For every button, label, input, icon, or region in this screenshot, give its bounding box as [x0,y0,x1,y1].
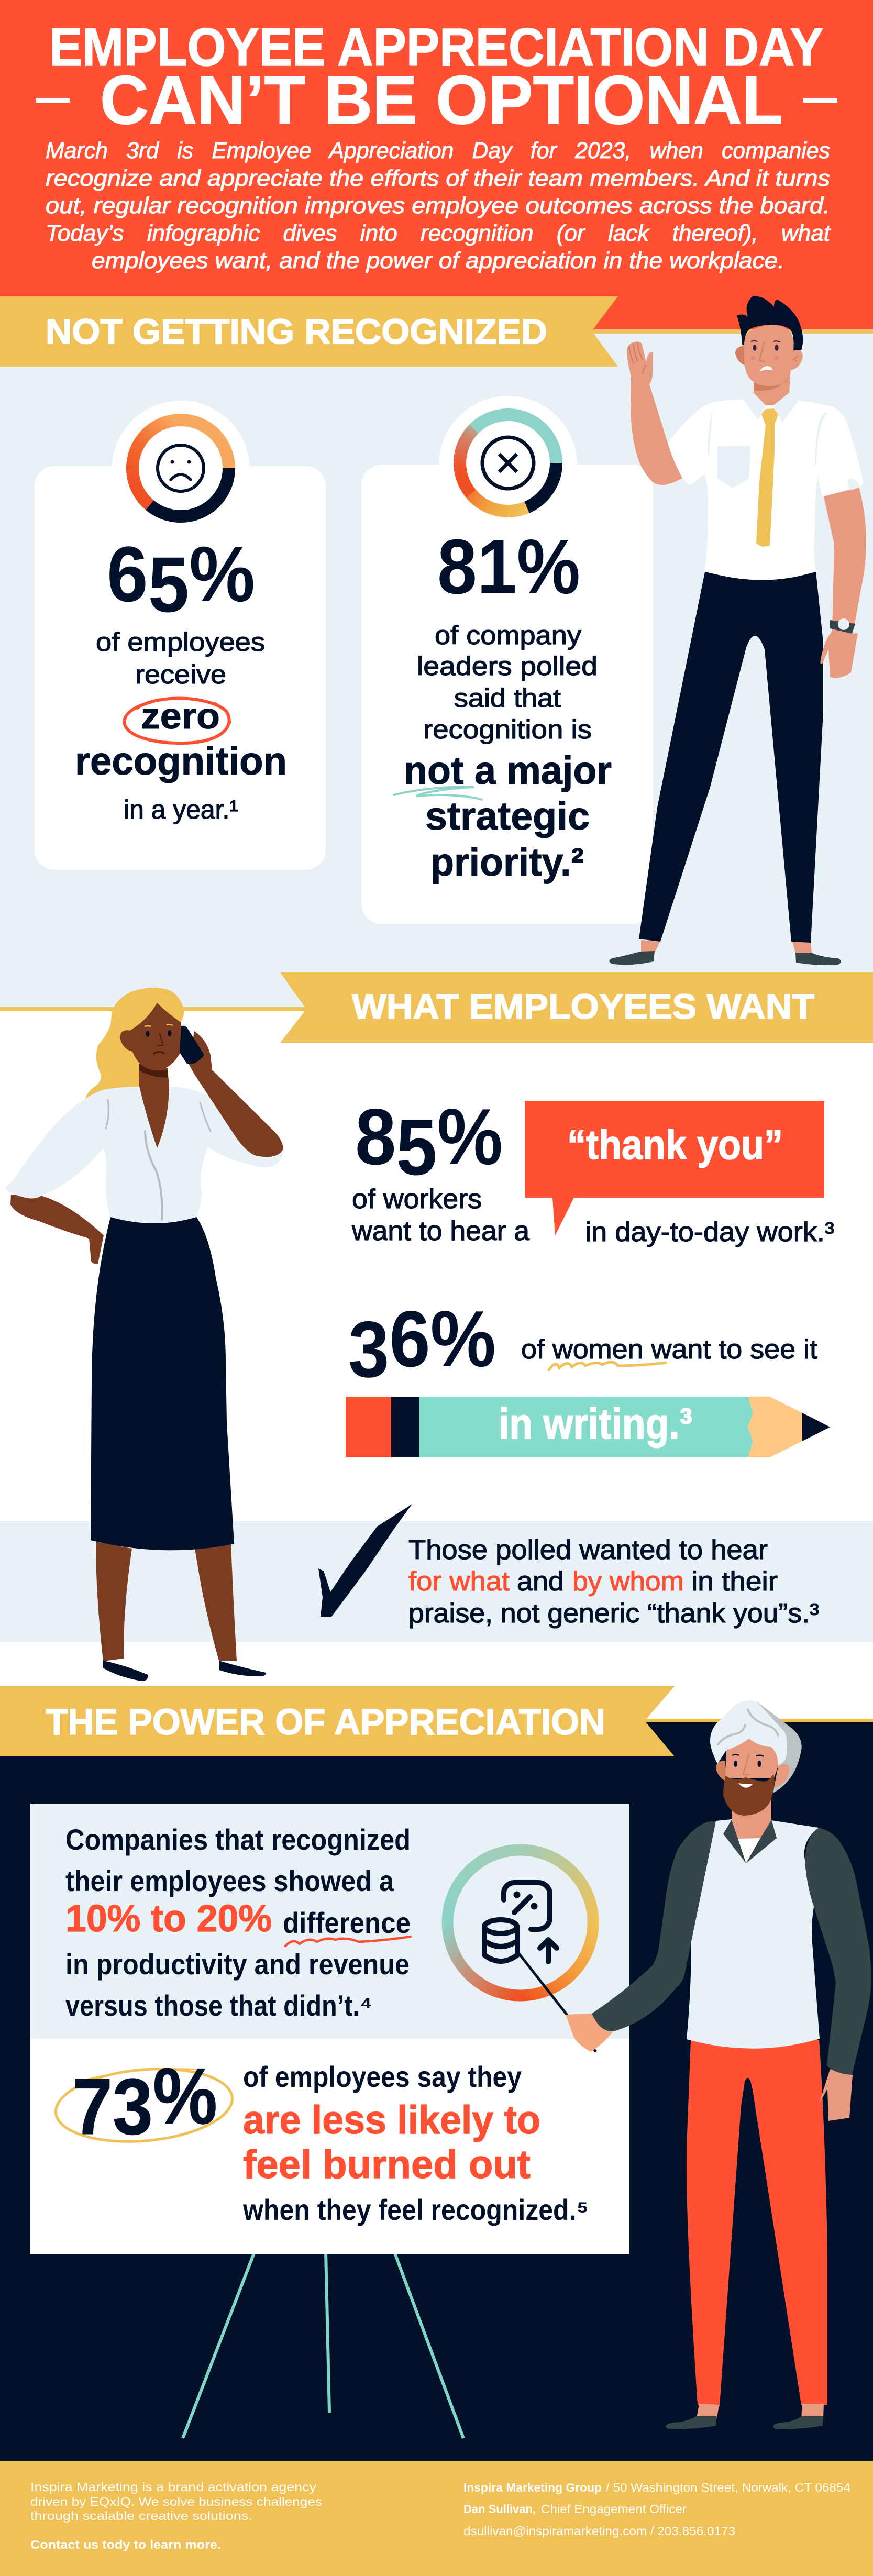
neck [732,1796,771,1863]
speech bubble [525,1101,824,1235]
intro paragraph: recognize and appreciate the efforts of their team members. And it turns [46,165,830,191]
head [744,325,793,385]
text: for what [408,1566,510,1597]
stat: 73%: 73 [72,2062,153,2151]
text [408,1535,819,1629]
text: of employees receive zero recognition in a year: in a year.¹ [124,795,238,824]
text: want to hear a [351,1216,529,1246]
text: 10% to 20% difference: their employees showed a [65,1864,394,1897]
text: less likely to feel burned out: are less likely to [243,2098,540,2142]
footer text: contact: Chief Engagement Officer [541,2502,687,2516]
text: of employees receive zero recognition in a year: recognition [75,739,287,783]
gold oval [53,2062,235,2148]
pointer stick [518,1952,596,2052]
text: 10% to 20% difference: Companies that recognized [65,1823,411,1856]
stat: 73%: % [153,2052,217,2141]
stat: 36% in writing [346,1295,830,1457]
footer text: about [30,2480,322,2551]
footer text: about: Contact us tody to learn more. [30,2538,221,2551]
text: of company leaders polled said recognition is not a major strategic priority: not a major [404,748,612,792]
text: less likely to feel burned out: when they feel recognized.⁵ [242,2193,589,2226]
text: in day-to-day work.³ [585,1217,834,1247]
text: of employees receive zero recognition in a year: zero [141,695,220,736]
footer text: contact: / 50 Washington Street, Norwalk, CT 06854 [606,2481,850,2494]
number: 6% [389,1295,496,1384]
footer text: about: Inspira Marketing is a brand activation agency [30,2480,317,2494]
blouse [6,1087,284,1223]
beard [723,1774,775,1816]
text [351,1184,529,1246]
hair [737,296,803,350]
icon: ring with database and percent [448,1850,593,1995]
text: of company leaders polled said recognition is not a major strategic priority: leaders polled [417,651,598,681]
face [129,1003,182,1070]
phone arm [189,1031,283,1157]
ears [716,1761,726,1782]
title line 1: EMPLOYEE APPRECIATION DAY [49,17,823,77]
icon: check mark [318,1504,412,1617]
face details [732,1754,764,1788]
ankles and shoes [666,2404,824,2429]
text: of company leaders polled said recognition is not a major strategic priority: priority.² [430,840,584,884]
icon: sad face ring [132,420,229,516]
hand holding pointer [566,2014,613,2052]
footer text: contact: Dan Sullivan, [463,2502,536,2516]
text: in their [691,1566,778,1597]
gold scribble [549,1362,666,1370]
shoes [103,1661,266,1681]
text: praise, not generic “thank you”s.³ [408,1598,819,1629]
text: of company leaders polled said recognition is not a major strategic priority: of company [435,621,581,650]
stat: 65%: 5 [148,540,189,628]
right sleeve [804,1828,871,2075]
footer text: about: driven by EQxIQ. We solve business challenges [30,2495,322,2508]
red scribble [285,1937,411,1946]
ankles and shoes [609,940,841,965]
face details [145,1024,173,1054]
footer text: contact: Inspira Marketing Group [463,2481,602,2494]
number: 8 [355,1092,400,1181]
teal scribble [394,787,482,800]
face [725,1739,778,1778]
red circle scribble [124,698,230,743]
speech bubble: “thank you” [567,1121,783,1168]
text: of employees receive zero recognition in a year: receive [135,660,226,689]
text: of workers [352,1184,482,1214]
text: of company leaders polled said recognition is not a major strategic priority: strategic [425,794,590,838]
illustration: presenter man [566,1700,871,2429]
text: of company leaders polled said recognition is not a major strategic priority [404,621,612,884]
text: 10% to 20% difference [65,1823,411,2022]
banner: what employees want: WHAT EMPLOYEES WANT [352,987,814,1026]
text: and [517,1566,564,1597]
text: of employees receive zero recognition in a year: of employees [96,627,265,657]
text: less likely to feel burned out: feel burned out [243,2142,531,2187]
footer [0,2461,873,2576]
banner: not getting recognized [0,296,618,367]
panel: 81% card [361,396,653,924]
panel: presentation board [30,1804,629,2254]
watch [830,618,855,634]
icon: x ring [460,415,556,511]
shirt [668,400,864,580]
trousers [639,572,823,944]
banner: what employees want [280,972,873,1043]
right hand [819,2069,853,2121]
stat: 65%: % [189,530,255,618]
text: 10% to 20% difference: 10% to 20% [65,1898,272,1940]
header [36,17,837,273]
easel legs [183,2252,463,2438]
text: of company leaders polled said recognition is not a major strategic priority: said that [454,683,561,713]
text: of women want to see it [521,1334,818,1365]
banner: the power of appreciation [0,1686,675,1756]
hair back [85,988,184,1101]
number: 3 [348,1305,389,1394]
light strip behind check note [0,1521,873,1642]
text: less likely to feel burned out: of employees say they [243,2060,522,2093]
footer text: about: through scalable creative solutions. [30,2509,252,2523]
intro paragraph: employees want, and the power of appreciation in the workplace. [92,248,784,273]
right arm [820,487,866,678]
stat: 65%: 6 [107,530,150,618]
collar [743,393,766,420]
ear [120,1030,133,1052]
intro paragraph [46,138,831,273]
pocket [717,446,750,488]
text: of employees receive zero recognition in a year [75,627,287,824]
vest [687,1819,820,2049]
turban back [757,1701,802,1793]
number: 5 [396,1103,437,1192]
text: 10% to 20% difference: versus those that didn’t.⁴ [65,1989,372,2022]
number: % [437,1092,503,1181]
collar [723,1820,777,1863]
footer text: contact [463,2481,850,2538]
banner: the power of appreciation: THE POWER OF APPRECIATION [46,1701,605,1742]
skirt [91,1217,234,1550]
text: less likely to feel burned out [242,2060,589,2226]
banner: not getting recognized: NOT GETTING RECOGNIZED [46,312,547,351]
turban front [710,1700,787,1765]
face details [750,341,780,372]
pencil: in writing.³ [499,1399,692,1448]
stat: 85% want thank you [351,1092,834,1247]
legs [96,1542,237,1661]
intro paragraph: Today’s infographic dives into recognition (or lack thereof), what [46,220,831,246]
footer text: contact: dsullivan@inspiramarketing.com / 203.856.0173 [463,2524,735,2538]
left arm [10,1195,104,1264]
text: 10% to 20% difference: in productivity and revenue [65,1948,410,1981]
text: by whom [572,1566,684,1597]
tie [756,408,778,547]
callout: for what and by whom [318,1504,819,1629]
intro paragraph: out, regular recognition improves employee outcomes across the board. [46,193,830,218]
neck [754,367,791,405]
text: Those polled wanted to hear [408,1535,768,1565]
stat: 81%: 81% [437,524,580,610]
text: 10% to 20% difference: difference [283,1906,411,1939]
neck [139,1064,169,1148]
intro paragraph: March 3rd is Employee Appreciation Day for 2023, when companies [46,138,830,163]
trousers [687,2040,827,2406]
illustration: woman on phone [6,988,284,1681]
illustration: man raising hand [609,296,866,965]
phone [180,1026,204,1064]
pencil [346,1397,830,1457]
raised arm [627,342,682,485]
panel: 65% card [35,401,326,870]
left sleeve [592,1821,716,2031]
text: of company leaders polled said recognition is not a major strategic priority: recognition is [423,715,592,744]
title line 2: CAN’T BE OPTIONAL [100,61,783,138]
ears [735,346,745,366]
